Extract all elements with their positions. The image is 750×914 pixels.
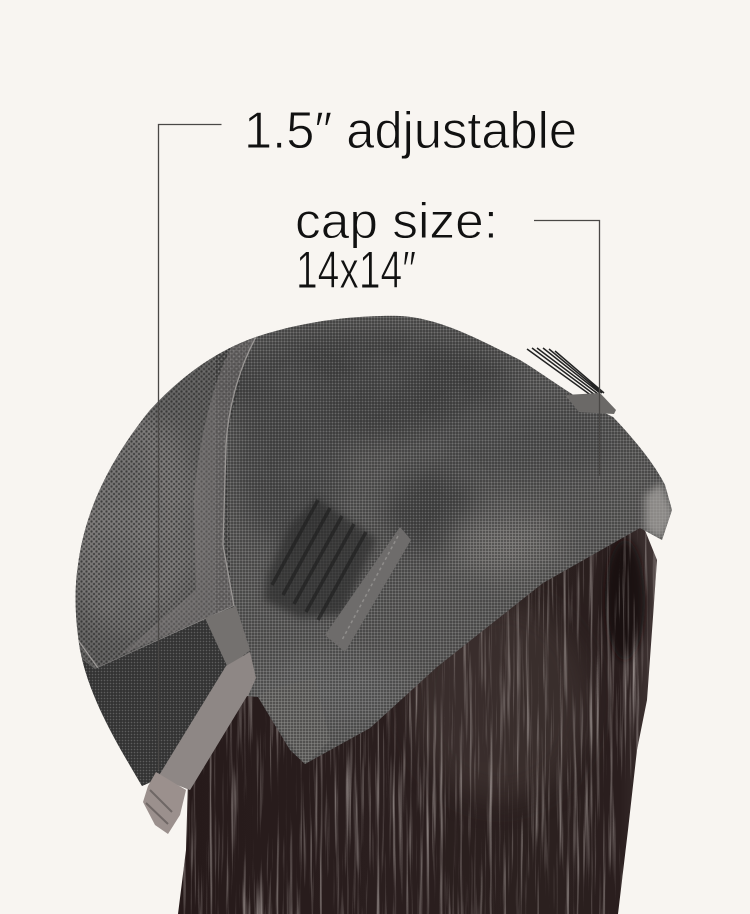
top right comb <box>527 348 616 414</box>
leader line: cap size <box>534 220 600 476</box>
lower left dark panel <box>70 606 234 790</box>
label: cap size <box>295 193 498 300</box>
label: 1.5 inch adjustable: 1.5″ adjustable <box>244 102 577 160</box>
hair <box>170 510 670 914</box>
strap band <box>158 652 256 792</box>
left panel coarse mesh <box>76 339 250 668</box>
right lace edge <box>645 482 674 540</box>
wig cap <box>60 300 680 800</box>
seam highlight line <box>78 337 256 668</box>
fine mesh texture <box>215 310 680 780</box>
strap upper mesh <box>205 606 250 668</box>
adjustable strap buckle <box>143 772 186 834</box>
center comb <box>264 498 411 652</box>
cap shading <box>60 330 620 725</box>
mottled texture <box>104 326 668 610</box>
label: cap size: 14x14″ <box>296 241 416 300</box>
label: cap size: cap size: <box>295 193 498 249</box>
leader line: adjustable <box>158 124 222 770</box>
vertical seam band <box>120 337 256 655</box>
neck tab <box>258 678 330 765</box>
